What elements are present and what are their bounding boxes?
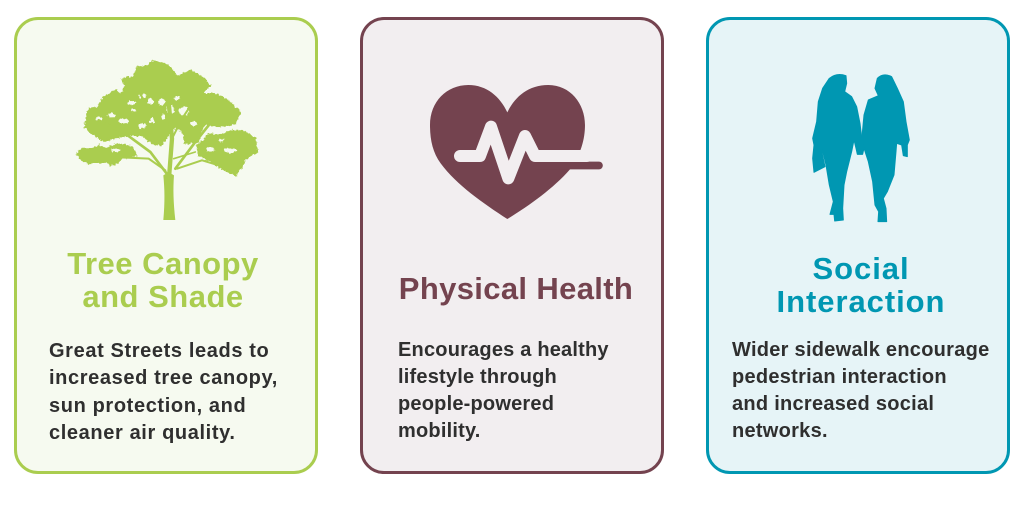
text: tree canopy description: increased tree canopy,: [49, 367, 278, 389]
text: physical health description: [398, 338, 609, 442]
panel: tree canopy and shade: [14, 17, 318, 474]
text: social interaction description: [732, 338, 990, 442]
text: social interaction description: networks.: [732, 420, 828, 442]
text: tree canopy description: [49, 340, 278, 444]
heading: tree canopy and shade: and Shade: [82, 279, 244, 314]
heading: social interaction: [777, 251, 945, 319]
trunk and branches: [99, 92, 219, 175]
heading: physical health: Physical Health: [399, 271, 633, 306]
text: social interaction description: Wider sidewalk encourage: [732, 338, 990, 360]
text: physical health description: people-powered: [398, 393, 554, 415]
canopy gaps: [96, 94, 236, 153]
panel: physical health: [360, 17, 664, 474]
text: tree canopy description: sun protection, and: [49, 395, 246, 417]
text: social interaction description: pedestrian interaction: [732, 366, 947, 388]
text: social interaction description: and increased social: [732, 393, 934, 415]
heading: tree canopy and shade: [67, 246, 259, 314]
heading: social interaction: Interaction: [777, 284, 945, 319]
heading: tree canopy and shade: Tree Canopy: [67, 246, 259, 281]
text: physical health description: mobility.: [398, 420, 481, 442]
text: physical health description: lifestyle through: [398, 366, 557, 388]
panel: social interaction: [706, 17, 1010, 474]
text: tree canopy description: Great Streets leads to: [49, 340, 269, 362]
text: tree canopy description: cleaner air quality.: [49, 422, 236, 444]
heading: social interaction: Social: [812, 251, 910, 286]
text: physical health description: Encourages a healthy: [398, 338, 609, 360]
